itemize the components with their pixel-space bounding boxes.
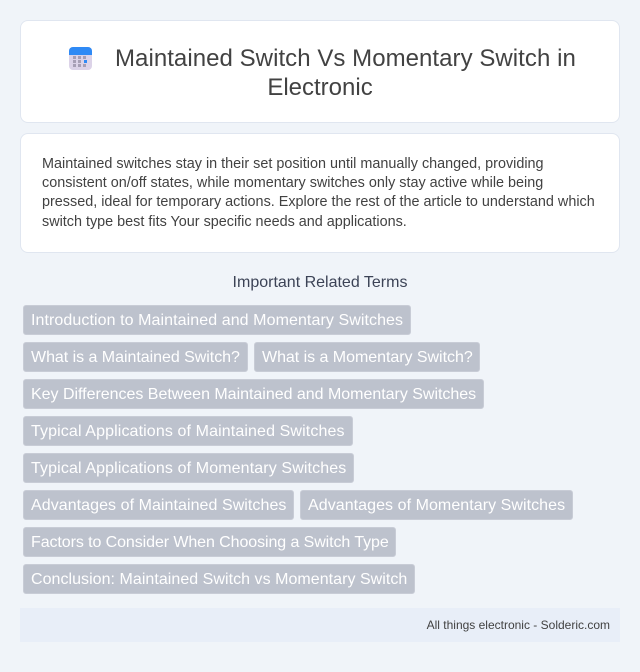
tag [23,453,354,483]
tag [23,564,415,594]
tag [254,342,480,372]
title: Maintained Switch Vs Momentary Switch in [115,45,576,72]
tag list [23,305,573,594]
intro text: consistent on/off states, while momentary switches only stay active while being [42,175,543,191]
title: Electronic [267,74,373,101]
tag [23,305,411,335]
tag: Conclusion: Maintained Switch vs Momentary Switch [31,571,407,588]
tag: What is a Momentary Switch? [262,349,473,366]
footer bar [20,608,620,642]
tag: Typical Applications of Maintained Switches [31,423,345,440]
intro text: switch type best fits Your specific needs and applications. [42,214,407,230]
tag: What is a Maintained Switch? [31,349,240,366]
tag: Advantages of Momentary Switches [308,497,565,514]
icon: calendar [69,47,92,70]
tag: Advantages of Maintained Switches [31,497,286,514]
tag [23,490,294,520]
intro text: Maintained switches stay in their set position until manually changed, providing [42,156,544,172]
tag [23,379,484,409]
tag [300,490,573,520]
tag: Key Differences Between Maintained and Momentary Switches [31,386,476,403]
related terms heading: Important Related Terms [233,274,407,291]
tag [23,527,396,557]
tag: Typical Applications of Momentary Switches [31,460,346,477]
intro text: pressed, ideal for temporary actions. Explore the rest of the article to understand which [42,194,595,210]
tag: Factors to Consider When Choosing a Switch Type [31,534,389,551]
intro text [42,156,595,230]
intro text panel [20,133,620,253]
title [115,45,576,101]
header panel [20,20,620,123]
tag: Introduction to Maintained and Momentary Switches [31,312,403,329]
tag [23,342,248,372]
footer text: All things electronic - Solderic.com [427,618,610,632]
tag [23,416,353,446]
